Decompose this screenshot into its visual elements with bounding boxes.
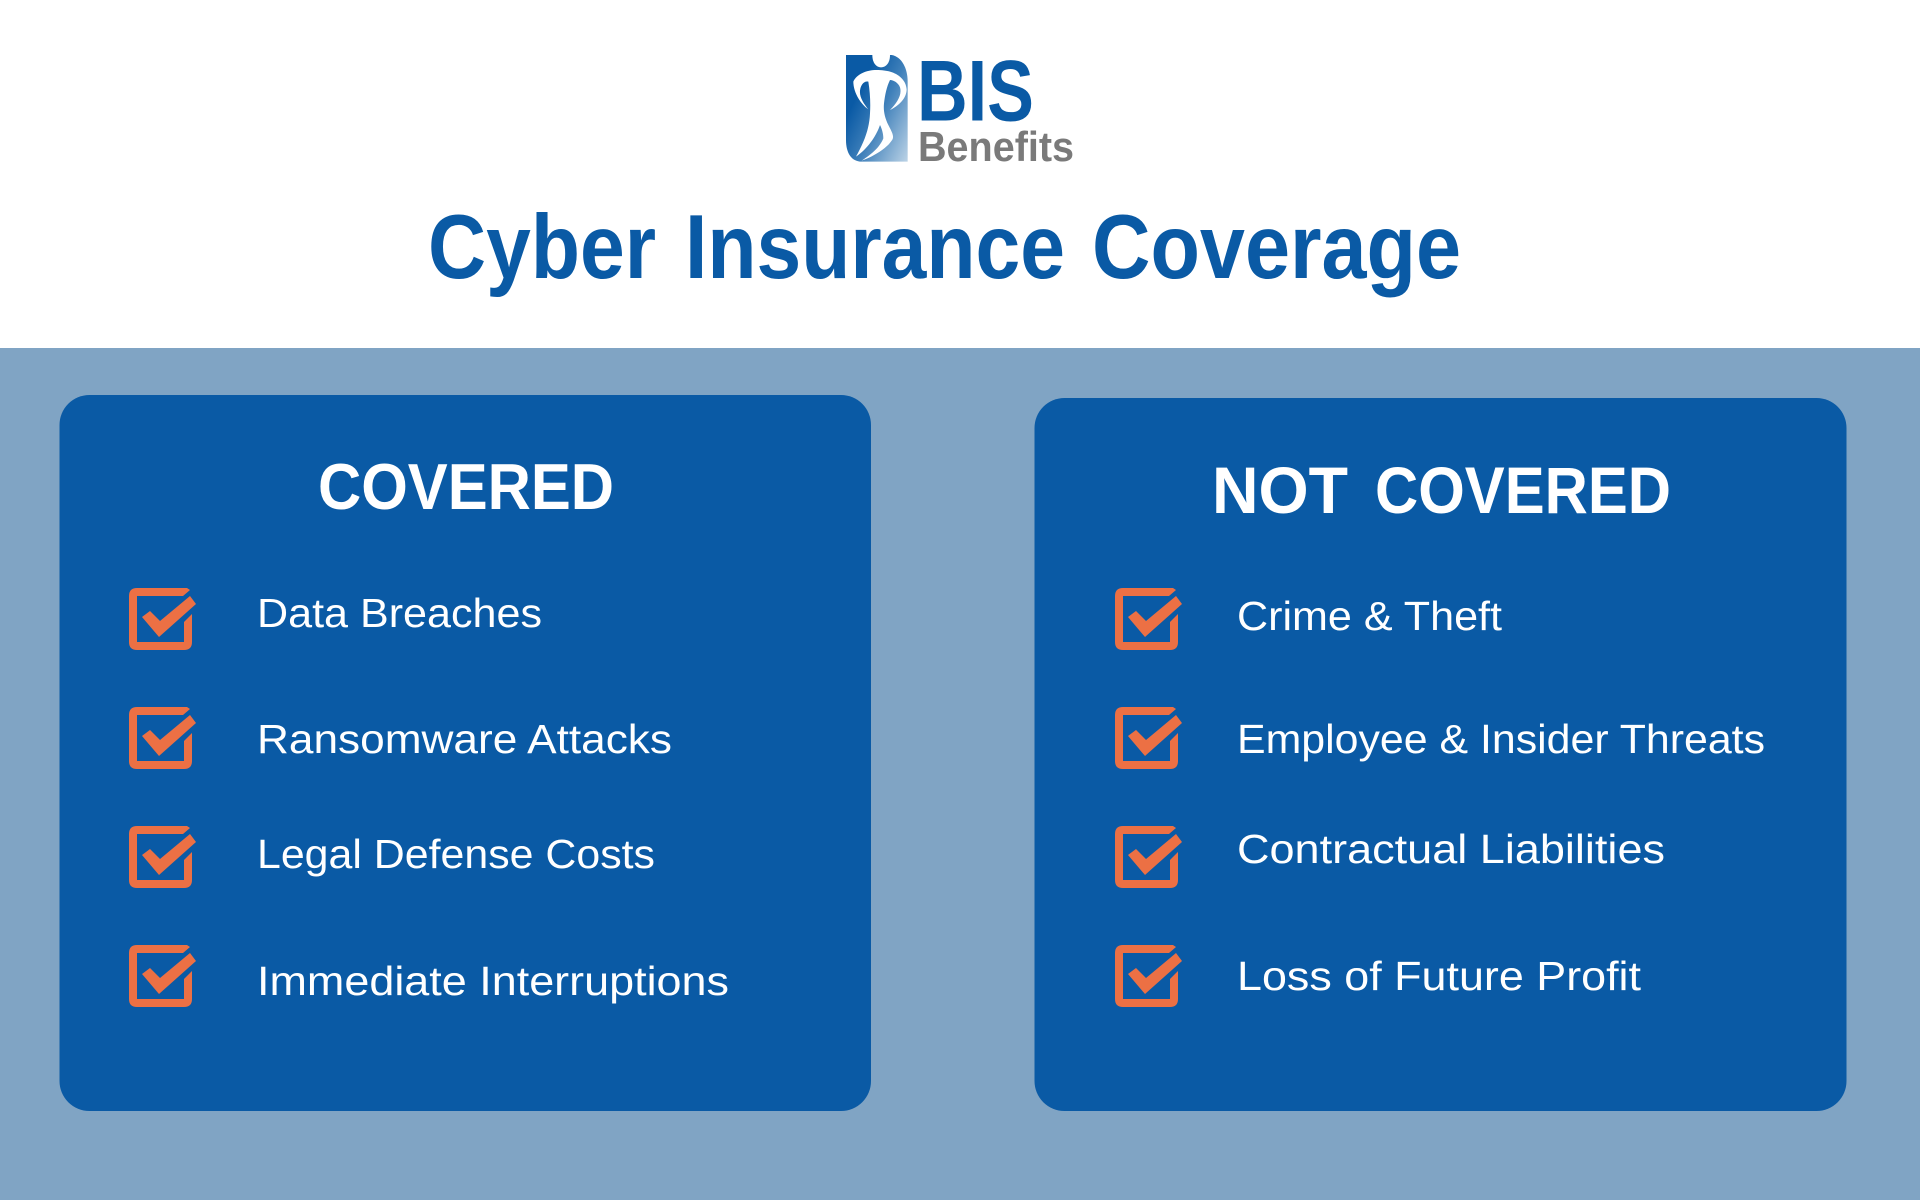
panel background	[1034, 398, 1846, 1111]
label: Loss of Future Profit	[1237, 953, 1642, 999]
icon: checkbox	[1115, 826, 1182, 888]
icon: checkbox	[129, 945, 196, 1007]
logo wordmark Benefits: Benefits	[918, 123, 1074, 170]
label: Immediate Interruptions	[257, 958, 729, 1004]
icon: checkbox	[129, 826, 196, 888]
item: data breaches	[129, 588, 542, 650]
label: Legal Defense Costs	[257, 831, 655, 877]
item: loss of future profit	[1115, 945, 1642, 1007]
label: Crime & Theft	[1237, 593, 1503, 639]
icon: checkbox	[1115, 588, 1182, 650]
item: immediate interruptions	[129, 945, 729, 1007]
heading: not covered: COVERED	[1375, 453, 1671, 527]
panel background	[60, 395, 871, 1111]
item: employee and insider threats	[1115, 707, 1765, 769]
panel: covered	[60, 395, 871, 1111]
item: legal defense costs	[129, 826, 655, 888]
item: contractual liabilities	[1115, 826, 1665, 888]
label: Ransomware Attacks	[257, 716, 672, 762]
icon: checkbox	[1115, 707, 1182, 769]
label: Data Breaches	[257, 590, 542, 636]
item: ransomware attacks	[129, 707, 672, 769]
label: Employee & Insider Threats	[1237, 716, 1765, 762]
icon: checkbox	[129, 707, 196, 769]
icon: shield with runner	[846, 55, 908, 162]
title: Insurance	[685, 197, 1065, 298]
logo: BIS Benefits	[846, 44, 1074, 170]
item: crime and theft	[1115, 588, 1503, 650]
blue background band	[0, 348, 1920, 1200]
heading: covered: COVERED	[318, 450, 614, 523]
title: Coverage	[1092, 197, 1461, 298]
heading: not covered: NOT	[1212, 453, 1348, 527]
title	[428, 197, 1461, 298]
logo wordmark BIS: BIS	[917, 44, 1034, 140]
label: Contractual Liabilities	[1237, 826, 1665, 872]
title: Cyber	[428, 197, 656, 298]
white header background	[0, 0, 1920, 348]
icon: checkbox	[1115, 945, 1182, 1007]
heading: not covered	[1212, 453, 1671, 527]
icon: checkbox	[129, 588, 196, 650]
panel: not covered	[1034, 398, 1846, 1111]
